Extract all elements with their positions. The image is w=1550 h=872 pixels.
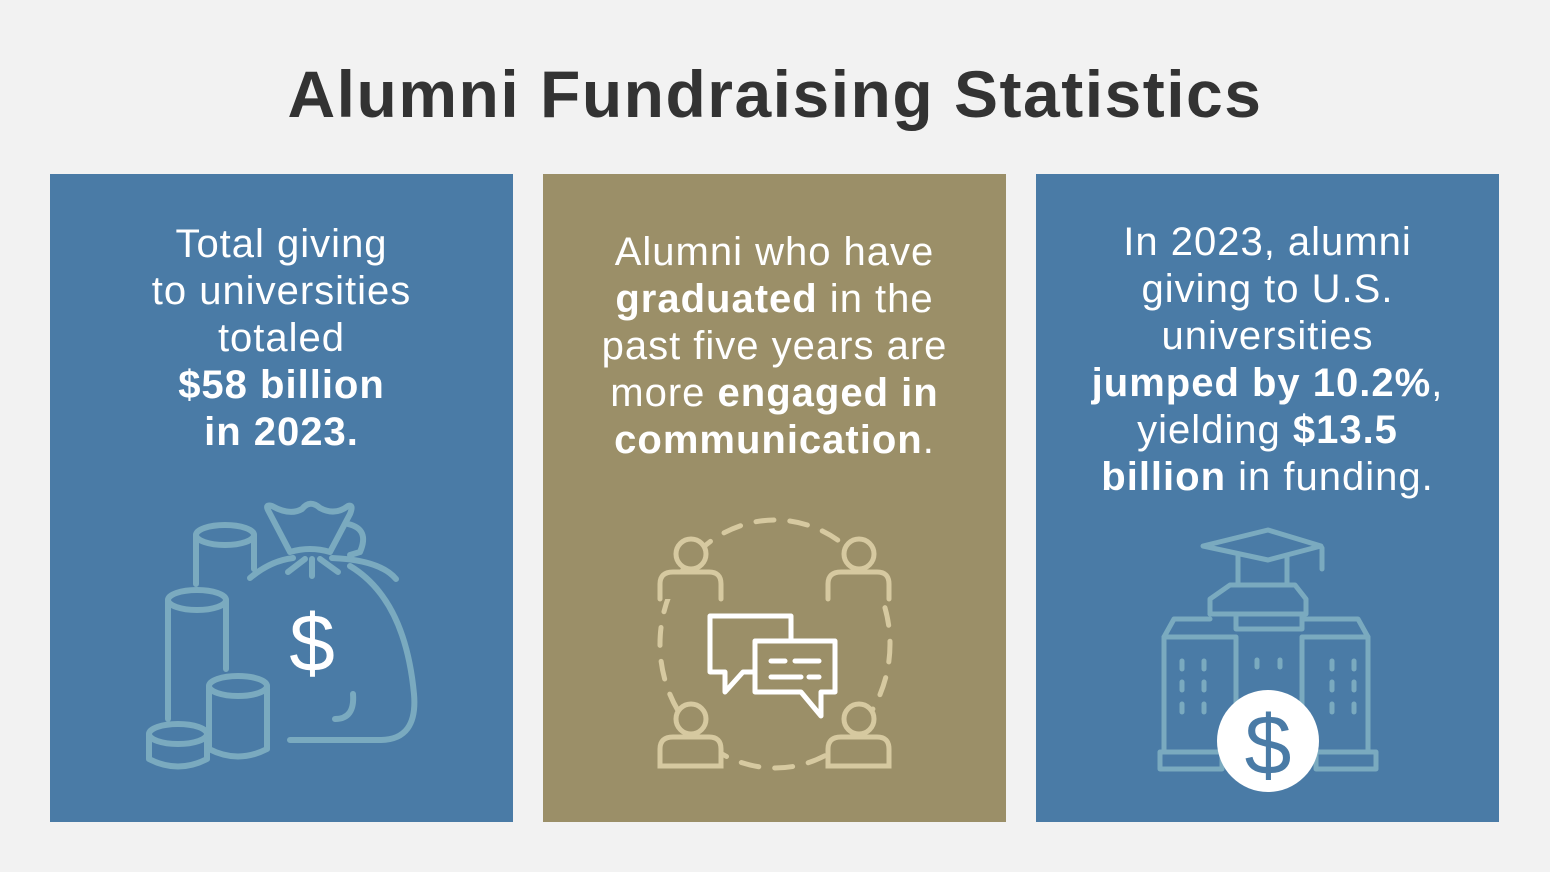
text: recent graduates: more engaged in bbox=[610, 371, 939, 415]
icon: people around chat bubbles bbox=[658, 518, 892, 770]
icon: money bag and coins: $ bbox=[289, 598, 335, 689]
title: Alumni Fundraising Statistics bbox=[288, 57, 1262, 131]
text: total giving: in 2023. bbox=[204, 410, 359, 454]
text: alumni giving growth: giving to U.S. bbox=[1142, 267, 1393, 311]
icon: university with dollar: $ bbox=[1245, 698, 1291, 792]
text: recent graduates bbox=[602, 230, 947, 462]
icon: money bag and coins bbox=[146, 500, 418, 770]
icon: university with dollar bbox=[1158, 528, 1378, 792]
text: recent graduates: communication. bbox=[614, 418, 935, 462]
text: alumni giving growth: jumped by 10.2%, bbox=[1092, 361, 1443, 405]
panel: total giving bbox=[50, 174, 513, 822]
text: total giving: Total giving bbox=[175, 222, 388, 266]
text: alumni giving growth: universities bbox=[1161, 314, 1374, 358]
text: recent graduates: graduated in the bbox=[615, 277, 934, 321]
text: alumni giving growth: yielding $13.5 bbox=[1137, 408, 1398, 452]
text: recent graduates: past five years are bbox=[602, 324, 947, 368]
text: total giving: $58 billion bbox=[178, 363, 385, 407]
text: alumni giving growth bbox=[1091, 220, 1443, 499]
text: total giving: totaled bbox=[218, 316, 345, 360]
text: alumni giving growth: In 2023, alumni bbox=[1123, 220, 1412, 264]
text: total giving bbox=[152, 222, 411, 454]
text: alumni giving growth: billion in funding. bbox=[1101, 455, 1434, 499]
text: total giving: to universities bbox=[152, 269, 411, 313]
panel: alumni giving growth bbox=[1036, 174, 1499, 822]
text: recent graduates: Alumni who have bbox=[615, 230, 934, 274]
panel: recent graduates bbox=[543, 174, 1006, 822]
